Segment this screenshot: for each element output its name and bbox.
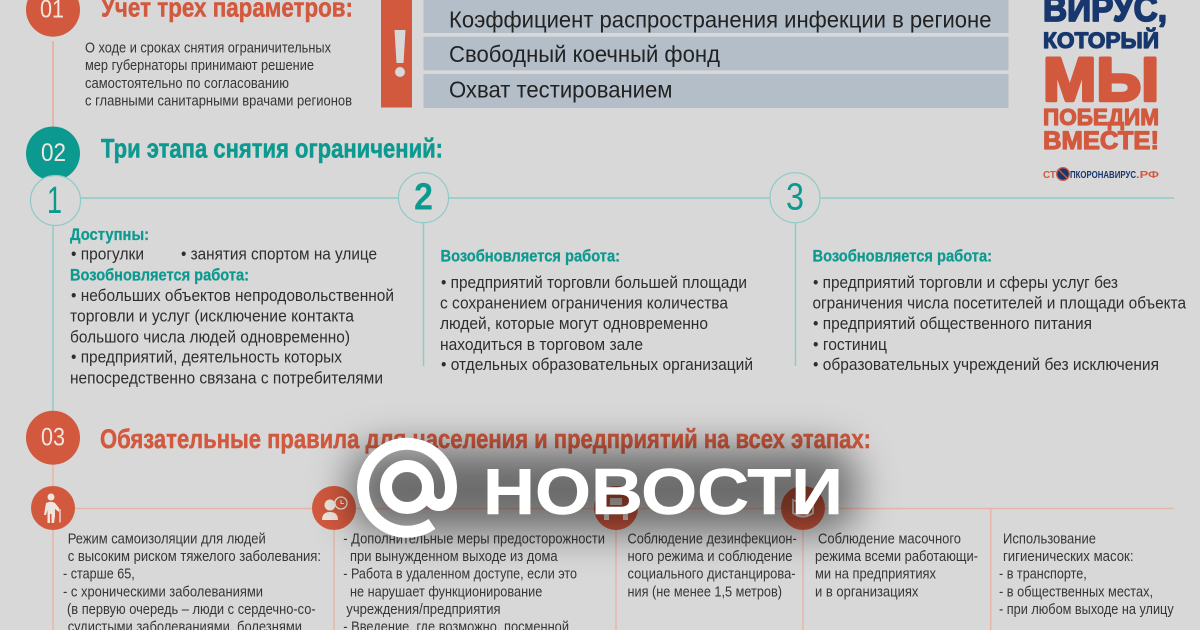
stage 1: 1 [47, 180, 62, 222]
website label with virus icon [1043, 168, 1160, 181]
rule text: self-isolation: - старше 65, [63, 566, 135, 583]
rule text: self-isolation: - с хроническими заболеваниями [63, 583, 263, 600]
stage 2: людей, которые могут одновременно [440, 314, 708, 333]
rule text: disinfection and distancing: социального дистанцирова- [628, 566, 796, 583]
number badge 02: 02 [41, 139, 66, 167]
number badge 03 [26, 411, 80, 465]
rule text: self-isolation [63, 530, 321, 630]
stage 3 [770, 173, 1186, 374]
rule text: hygienic masks: - при любом выходе на улицу [999, 601, 1174, 618]
paragraph about governors: с главными санитарными врачами регионов [85, 92, 352, 110]
section 03: mandatory rules [26, 411, 1174, 630]
parameter bar: bed capacity [424, 37, 1008, 70]
rule text: additional precautions: учреждения/предприятия [346, 601, 501, 618]
campaign logo: the virus we will defeat together: ВМЕСТЕ! [1043, 127, 1159, 155]
stage 1: непосредственно связана с потребителями [70, 368, 383, 387]
rule text: mask regime at work [815, 530, 978, 600]
stage 3: • предприятий общественного питания [813, 314, 1092, 333]
rule text: self-isolation: (в первую очередь – люди с сердечно-со- [67, 601, 316, 618]
section 01: three parameters [26, 0, 1008, 127]
campaign logo: the virus we will defeat together: КОТОРЫЙ [1043, 28, 1159, 53]
stage 1: Возобновляется работа: [70, 266, 249, 284]
rule text: disinfection and distancing: ного режима и соблюдение [628, 548, 792, 565]
stage 2: • предприятий торговли большей площади [441, 273, 747, 292]
parameter bar: testing coverage: Охват тестированием [449, 76, 672, 102]
paragraph about governors: мер губернаторы принимают решение [85, 57, 314, 74]
stage 1: • небольших объектов непродовольственной [71, 286, 394, 305]
stage 1: большого числа людей одновременно) [70, 327, 350, 346]
stage 2: 2 [414, 176, 433, 218]
paragraph about governors: самостоятельно по согласованию [85, 75, 289, 92]
rule text: additional precautions [343, 530, 605, 630]
number badge 03: 03 [41, 424, 65, 452]
stage 2 [398, 173, 753, 374]
stage 1: • предприятий, деятельность которых [71, 348, 342, 367]
stage 3: • гостиниц [813, 335, 887, 354]
rule text: mask regime at work: режима всеми работающи- [815, 548, 978, 565]
stage 1: Доступны: [70, 226, 149, 244]
heading 02: Три этапа снятия ограничений: [101, 134, 443, 164]
rule text: hygienic masks [999, 530, 1174, 618]
rule text: disinfection and distancing [628, 530, 797, 600]
campaign logo: the virus we will defeat together: МЫ [1043, 46, 1159, 114]
stage 2: находиться в торговом зале [440, 335, 643, 354]
number badge 01 [26, 0, 80, 37]
paragraph about governors [85, 40, 352, 110]
rule text: hygienic masks: гигиенических масок: [1003, 548, 1134, 565]
stage 3: Возобновляется работа: [812, 248, 992, 266]
icon: disinfection [594, 486, 638, 530]
rule text: additional precautions: при вынужденном выходе из дома [350, 548, 558, 565]
number badge 02 [26, 126, 80, 180]
website label with virus icon: СТ [1043, 170, 1056, 181]
rule text: self-isolation: с высоким риском тяжелого заболевания: [68, 548, 321, 565]
news wordmark: НОВОСТИ [483, 455, 843, 528]
website label with virus icon: ПКОРОНАВИРУС [1070, 170, 1136, 181]
campaign logo: the virus we will defeat together [1043, 0, 1167, 181]
rule text: additional precautions: - Дополнительные меры предосторожности [343, 530, 605, 547]
stage 2: • отдельных образовательных организаций [441, 355, 753, 374]
rule text: additional precautions: не нарушает функционирование [350, 583, 542, 600]
website label with virus icon: .РФ [1136, 170, 1160, 181]
stage 3: 3 [786, 176, 804, 218]
rule text: hygienic masks: Использование [1003, 530, 1096, 547]
rule text: mask regime at work: и в организациях [815, 583, 919, 600]
parameter bar: testing coverage [424, 74, 1008, 108]
stage 2: с сохранением ограничения количества [440, 293, 728, 312]
stage 1: • занятия спортом на улице [181, 244, 377, 264]
icon: exclamation mark block [381, 0, 412, 108]
stage 2: Возобновляется работа: [440, 248, 620, 266]
stage 3: • предприятий торговли и сферы услуг без [813, 273, 1118, 292]
stage 1: • прогулки [71, 244, 144, 264]
rule text: disinfection and distancing: ния (не менее 1,5 метров) [628, 583, 782, 600]
rule text: mask regime at work: Соблюдение масочного [818, 530, 961, 547]
news logo watermark [350, 444, 856, 532]
rule text: mask regime at work: ми на предприятиях [815, 566, 936, 583]
heading 03: Обязательные правила для населения и предприятий на всех этапах: [100, 424, 871, 454]
stage 1 [30, 176, 394, 387]
rule text: self-isolation: Режим самоизоляции для людей [68, 530, 266, 547]
rule text: hygienic masks: - в транспорте, [999, 566, 1087, 583]
rule text: additional precautions: - Работа в удаленном доступе, если это [343, 566, 577, 583]
stage 1: торговли и услуг (исключение контакта [70, 307, 355, 326]
section 02: three stages [26, 126, 1186, 411]
stage 3: • образовательных учреждений без исключения [813, 355, 1159, 374]
campaign logo: the virus we will defeat together: ПОБЕДИМ [1043, 104, 1159, 130]
icon: elderly person with cane [31, 486, 75, 530]
icon: at sign [363, 444, 451, 532]
rule text: hygienic masks: - в общественных местах, [999, 583, 1153, 600]
parameter bar: bed capacity: Свободный коечный фонд [449, 41, 721, 67]
paragraph about governors: О ходе и сроках снятия ограничительных [85, 40, 331, 56]
icon: face mask [781, 486, 825, 530]
icon: employee with clock [312, 486, 356, 530]
rule text: disinfection and distancing: Соблюдение дезинфекцион- [628, 530, 797, 547]
parameter bar: infection rate: Коэффициент распространения инфекции в регионе [449, 6, 992, 32]
